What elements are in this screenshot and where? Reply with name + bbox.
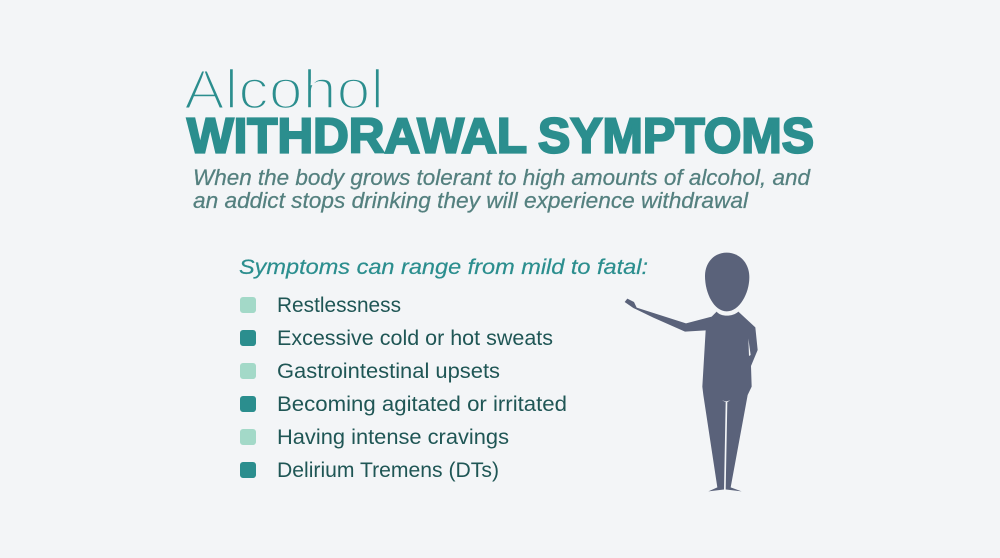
figure head	[705, 253, 749, 311]
subtitle	[193, 165, 811, 213]
subtitle: When the body grows tolerant to high amounts of alcohol, and	[193, 165, 811, 190]
list item: Gastrointestinal upsets: Gastrointestinal upsets	[277, 360, 500, 383]
list item: Excessive cold or hot sweats: Excessive cold or hot sweats	[277, 327, 553, 350]
figure body	[625, 299, 758, 491]
title: Withdrawal Symptoms: SYMPTOMS	[538, 109, 814, 163]
title	[184, 58, 814, 163]
list item: Delirium Tremens: Delirium Tremens (DTs)	[277, 459, 499, 482]
arm gap	[748, 338, 751, 356]
icon: pointing person silhouette	[625, 253, 758, 491]
title: Alcohol: Alcohol	[184, 58, 384, 120]
title: Withdrawal Symptoms: WITHDRAWAL	[187, 109, 527, 163]
list item: Becoming agitated or irritated: Becoming agitated or irritated	[277, 393, 567, 416]
list item: Restlessness: Restlessness	[277, 294, 401, 317]
title: Withdrawal Symptoms	[187, 109, 814, 163]
subtitle: an addict stops drinking they will experience withdrawal	[193, 188, 749, 213]
list item: Having intense cravings: Having intense cravings	[277, 426, 509, 449]
symptom list	[240, 294, 567, 482]
leg gap	[722, 400, 730, 491]
list heading: Symptoms can range from mild to fatal:	[239, 255, 648, 279]
